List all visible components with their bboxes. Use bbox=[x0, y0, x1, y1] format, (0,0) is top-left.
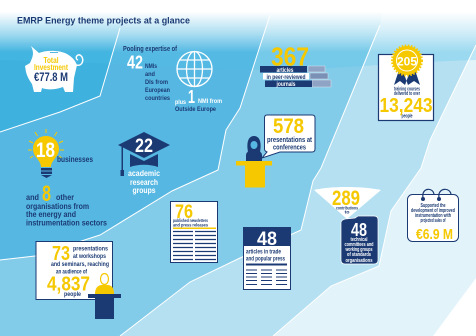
panel: 76 newsletters bbox=[170, 202, 218, 262]
callout: 289 contributions funnel: contributions bbox=[336, 206, 358, 210]
icon: presenter at yellow podium bbox=[236, 136, 272, 188]
panel: calendar with projected sales: instrumentation with bbox=[415, 213, 451, 219]
title: EMRP Energy theme projects at a glance bbox=[17, 16, 190, 26]
text: pooling expertise: plus bbox=[175, 99, 186, 106]
stat: 367 articles with books: in peer-reviewed bbox=[266, 74, 306, 81]
text: other organisations: instrumentation sectors bbox=[26, 218, 107, 228]
stat: 367 articles with books: articles bbox=[276, 67, 294, 74]
text: pooling expertise: 1 bbox=[188, 87, 195, 107]
panel: 48 articles in trade press: and popular press bbox=[246, 256, 285, 262]
panel: calendar with projected sales: development of improved bbox=[411, 208, 455, 214]
text: pooling expertise: Outside Europe bbox=[175, 106, 216, 113]
icon: globe bbox=[177, 52, 212, 86]
panel: 73 presentations at workshops: presentations bbox=[73, 246, 108, 252]
text: other organisations bbox=[26, 181, 107, 228]
icon: graduation cap with 22 academic research groups: groups bbox=[132, 186, 156, 195]
panel: training courses: 205 bbox=[397, 54, 417, 68]
panel: calendar with projected sales: Supported the bbox=[420, 203, 446, 209]
panel: 76 newsletters: and press releases bbox=[173, 222, 208, 228]
panel: training courses: 13,243 bbox=[380, 95, 432, 117]
panel: 48 technical committees: of standards bbox=[347, 252, 371, 258]
icon: light bulb with 18 businesses: businesses bbox=[57, 155, 93, 164]
callout: 578 presentations at conferences: conferences bbox=[273, 142, 306, 152]
panel: 73 presentations at workshops: 4,837 bbox=[47, 274, 90, 296]
panel: training courses: people bbox=[402, 114, 413, 120]
panel: calendar with projected sales bbox=[408, 189, 458, 243]
icon: light bulb with 18 businesses bbox=[28, 129, 93, 178]
panel: 73 presentations at workshops: people bbox=[64, 291, 81, 298]
panel: 76 newsletters: published newsletters bbox=[173, 218, 208, 223]
icon: piggy bank with total investment: Investment bbox=[34, 63, 68, 72]
panel: 48 articles in trade press: 48 bbox=[257, 228, 277, 250]
text: pooling expertise: DIs from bbox=[145, 79, 168, 86]
text: pooling expertise: European bbox=[145, 87, 170, 94]
panel: 48 technical committees bbox=[341, 216, 378, 264]
panel: calendar with projected sales: €6.9 M bbox=[416, 226, 453, 243]
text: pooling expertise: NMI from bbox=[198, 98, 222, 105]
panel: 73 presentations at workshops: at workshops bbox=[73, 253, 106, 260]
callout: 578 presentations at conferences: presentations at bbox=[267, 135, 312, 144]
panel: 73 presentations at workshops: 73 bbox=[52, 243, 70, 265]
callout: 578 presentations at conferences bbox=[262, 115, 315, 158]
callout: 578 presentations at conferences: 578 bbox=[273, 115, 304, 138]
panel: 48 technical committees: 48 bbox=[351, 220, 367, 240]
panel: 73 presentations at workshops bbox=[36, 242, 112, 300]
panel: 76 newsletters: 76 bbox=[175, 202, 193, 223]
icon: graduation cap with 22 academic research groups: 22 bbox=[135, 136, 153, 157]
text: other organisations: and bbox=[26, 193, 39, 202]
text: pooling expertise: and bbox=[145, 71, 155, 78]
panel: training courses: training courses bbox=[394, 86, 420, 92]
panel: 48 articles in trade press: articles in trade bbox=[246, 248, 281, 256]
icon: piggy bank with total investment: €77.8 M bbox=[34, 72, 68, 84]
panel: 73 presentations at workshops: and seminars, reaching bbox=[51, 261, 109, 268]
panel: calendar with projected sales: projected sales of bbox=[420, 218, 446, 224]
icon: graduation cap with 22 academic research groups bbox=[118, 132, 170, 195]
text: other organisations: other bbox=[56, 193, 74, 202]
stat: 367 articles with books: 367 bbox=[271, 42, 309, 72]
icon: speaker at navy podium bbox=[88, 274, 121, 319]
panel: training courses: delivered to over bbox=[394, 91, 420, 97]
panel: 48 technical committees: committees and bbox=[344, 242, 374, 248]
icon: piggy bank with total investment: Total bbox=[44, 56, 58, 65]
callout: 289 contributions funnel: 289 bbox=[332, 187, 360, 210]
icon: graduation cap with 22 academic research groups: research bbox=[130, 178, 158, 187]
panel: 48 technical committees: technical bbox=[350, 237, 368, 243]
callout: 289 contributions funnel bbox=[314, 187, 381, 219]
panel: 48 technical committees: organisations bbox=[346, 258, 373, 264]
icon: piggy bank with total investment bbox=[25, 46, 83, 92]
text: pooling expertise: Pooling expertise of bbox=[123, 46, 178, 53]
text: other organisations: organisations from bbox=[26, 202, 89, 211]
panel: training courses bbox=[378, 46, 434, 120]
panel: 48 technical committees: working groups bbox=[345, 247, 373, 253]
stat: 367 articles with books: journals bbox=[276, 81, 296, 88]
text: pooling expertise bbox=[123, 46, 222, 113]
callout: 289 contributions funnel: to bbox=[344, 210, 350, 214]
text: other organisations: the energy and bbox=[26, 210, 76, 219]
text: pooling expertise: NMIs bbox=[145, 63, 157, 70]
text: pooling expertise: countries bbox=[145, 95, 170, 102]
icon: graduation cap with 22 academic research groups: academic bbox=[128, 169, 160, 178]
text: other organisations: 8 bbox=[42, 181, 51, 206]
stat: 367 articles with books bbox=[260, 42, 331, 88]
panel: 73 presentations at workshops: an audience of bbox=[56, 268, 88, 276]
icon: light bulb with 18 businesses: 18 bbox=[36, 139, 55, 162]
text: pooling expertise: 42 bbox=[127, 52, 143, 72]
panel: 48 articles in trade press bbox=[244, 228, 290, 290]
